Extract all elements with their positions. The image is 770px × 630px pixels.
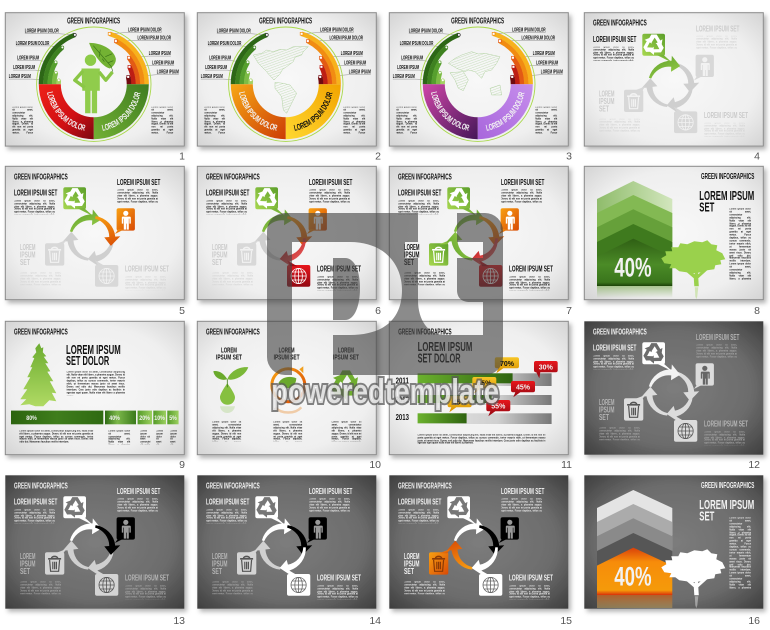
slide 14 cycle arrows <box>251 513 316 577</box>
slide 10 column headings: IPSUM SET <box>333 354 359 361</box>
slide 3 labels: LOREM IPSUM DOLOR <box>521 35 555 41</box>
slide 8 heading <box>699 189 754 215</box>
slide 6 headings: SET <box>212 258 222 267</box>
slide 14 headings: SET <box>212 567 222 576</box>
slide numbers: 16 <box>748 615 760 627</box>
slide 3 ring chart <box>420 26 536 142</box>
slide 3: world ring <box>388 12 574 152</box>
slide 2 labels: LOREM IPSUM <box>344 60 366 66</box>
slide 5 headings: LOREM <box>20 243 36 252</box>
slide 9 column texts <box>19 430 177 444</box>
slide 4 headings: LOREM <box>599 89 615 98</box>
slide 3 labels: LOREM IPSUM <box>541 70 563 76</box>
slide 1 ring chart: LOREM IPSUM DOLOR <box>47 92 86 131</box>
slide 5 text blocks <box>14 189 166 290</box>
slide 5 headings <box>14 178 169 274</box>
slide 11 background <box>389 321 568 455</box>
slide numbers: 5 <box>179 305 185 317</box>
slide 8 background <box>584 166 763 300</box>
slide 2 labels <box>201 27 371 80</box>
slide 2 label lines <box>201 32 371 80</box>
slide numbers: 6 <box>375 305 381 317</box>
slide numbers: 7 <box>566 305 572 317</box>
callouts: 30% <box>539 364 554 371</box>
slide 10: sprout, leaf cycle, recycle <box>197 321 376 455</box>
slide 16 percentage: 40% <box>614 562 652 592</box>
segmented percentage bar: 80% <box>26 415 37 422</box>
slide 2 labels: LOREM IPSUM <box>201 74 223 80</box>
slide 7 background <box>389 166 568 300</box>
slide 6 title: GREEN INFOGRAPHICS <box>206 172 260 181</box>
slide 2 ring chart <box>228 26 344 142</box>
slide 4 cycle arrows <box>638 51 703 115</box>
slide 11 heading: SET DOLOR <box>418 352 461 366</box>
slide 13 headings: LOREM <box>20 552 36 561</box>
slide 4 headings: SET <box>599 104 609 113</box>
slide numbers: 14 <box>369 615 381 627</box>
slide numbers: 2 <box>375 150 381 162</box>
slide 5 background <box>5 166 184 300</box>
slide 16 heading <box>699 498 754 524</box>
segmented percentage bar: 5% <box>169 415 177 422</box>
slide 3 labels: LOREM IPSUM DOLOR <box>400 41 433 47</box>
slide 6 headings: LOREM IPSUM SET <box>206 189 249 198</box>
slide 1 labels: LOREM IPSUM DOLOR <box>137 35 171 41</box>
slide 3 label lines <box>393 32 563 80</box>
year labels: 2011 <box>396 375 409 385</box>
slide numbers <box>173 150 760 627</box>
slide 3 ring chart: LOREM IPSUM DOLOR <box>486 92 524 131</box>
slide 10 column headings: IPSUM SET <box>274 354 300 361</box>
slide 4 background <box>584 13 763 146</box>
slide 7: cycle, step four <box>389 166 568 300</box>
slide 2 labels: LOREM IPSUM DOLOR <box>320 27 354 33</box>
slide 9 background <box>5 321 184 455</box>
slide 13 text blocks <box>14 498 166 599</box>
slide 11 heading: LOREM IPSUM <box>418 340 472 354</box>
slide 5 headings: LOREM IPSUM SET <box>14 189 57 198</box>
slide 7 headings: IPSUM <box>404 251 420 260</box>
slide 13 headings <box>14 487 169 583</box>
slide 3 labels: LOREM IPSUM DOLOR <box>409 29 443 35</box>
slide 2 labels: LOREM IPSUM <box>205 65 227 71</box>
slide 15 cycle arrows <box>443 513 508 577</box>
slide 12 headings: LOREM <box>599 398 615 407</box>
slide 14 headings: LOREM IPSUM SET <box>309 487 352 496</box>
icon: white tree <box>661 549 725 608</box>
year labels: 2013 <box>396 412 409 422</box>
slide 6 background <box>197 166 376 300</box>
slide 7 headings: LOREM <box>404 243 420 252</box>
year labels: 2012 <box>396 394 409 404</box>
slide 10 column headings: LOREM <box>221 347 237 354</box>
slide 5 icon tiles <box>45 187 135 287</box>
map: world <box>448 52 502 95</box>
slide 7 headings: LOREM IPSUM SET <box>509 265 553 274</box>
slide 1 labels: LOREM IPSUM <box>17 56 39 62</box>
slide 16 chevron stack <box>597 490 672 608</box>
slide 15 text blocks <box>398 498 550 599</box>
slide 7 headings: LOREM IPSUM SET <box>501 178 544 187</box>
slide 3 labels: LOREM IPSUM <box>401 56 423 62</box>
slide 1 labels <box>9 27 179 80</box>
slide 12 headings <box>593 333 748 429</box>
slide 11 heading <box>418 340 472 366</box>
slide 3 title: GREEN INFOGRAPHICS <box>451 16 504 26</box>
slide 7 icon tiles <box>429 187 519 287</box>
slide 7 headings: SET <box>404 258 414 267</box>
slide 1 labels: LOREM IPSUM <box>149 51 171 57</box>
slide 13: dark cycle, step two <box>5 475 184 609</box>
slide 6 cycle arrows <box>251 204 316 268</box>
slide 11 title: GREEN INFOGRAPHICS <box>398 327 452 336</box>
slide 13 headings: LOREM IPSUM SET <box>125 574 169 583</box>
slide 1 labels: LOREM IPSUM <box>9 74 31 80</box>
slide 4 headings <box>593 24 748 120</box>
slide 3 labels: LOREM IPSUM <box>533 51 555 57</box>
slide 7 headings <box>398 178 553 274</box>
slide 6 headings: LOREM IPSUM SET <box>317 265 361 274</box>
slide 2 labels: LOREM IPSUM <box>209 56 231 62</box>
slide 14 headings: IPSUM <box>212 560 228 569</box>
year labels <box>396 375 409 422</box>
slide 6 headings: LOREM <box>212 243 228 252</box>
slide 12 background <box>584 321 763 455</box>
slide 3 labels: LOREM IPSUM <box>397 65 419 71</box>
slide numbers: 4 <box>754 150 760 162</box>
slide 10 background <box>197 321 376 455</box>
slide numbers: 1 <box>179 150 185 162</box>
slide 14 headings <box>206 487 361 583</box>
slide 14 headings: LOREM <box>212 552 228 561</box>
slide 13 icon tiles <box>45 496 135 596</box>
slide 2 title: GREEN INFOGRAPHICS <box>259 16 312 26</box>
slide numbers: 3 <box>566 150 572 162</box>
icon: recycle arrows <box>327 370 362 402</box>
slide 4 title: GREEN INFOGRAPHICS <box>593 19 647 28</box>
slide 6 headings <box>206 178 361 274</box>
slide 10 column headings <box>216 347 359 361</box>
slide 1 labels: LOREM IPSUM <box>13 65 35 71</box>
slide 7 text blocks <box>398 189 550 290</box>
callouts <box>448 357 558 416</box>
slide 15 headings: IPSUM <box>404 560 420 569</box>
slide 1 labels: LOREM IPSUM DOLOR <box>25 29 59 35</box>
slide 12 headings: IPSUM <box>599 406 615 415</box>
slide 7 title: GREEN INFOGRAPHICS <box>398 172 452 181</box>
slide 12 headings: LOREM IPSUM SET <box>696 333 739 342</box>
slide 2: Americas ring <box>196 12 382 152</box>
slide 5 headings: LOREM IPSUM SET <box>117 178 160 187</box>
slide 15 headings: LOREM IPSUM SET <box>501 487 544 496</box>
slide 12 headings: SET <box>599 413 609 422</box>
slide 9 column texts: Lorem ipsum dolor sit amet, consectetur adipiscing elit. Nulla vitae elit libero, a pharetra augue. Donec id elit non mi porta gravida at eget metus. Fusce dapibus, tellus ac cursus commodo, tortor mauris nibh, ut fermentum massa justo sit amet risus. Donec sed odio dui. Maecenas faucibus mollis interdum. <box>19 430 93 443</box>
slide 3 ring chart: LOREM IPSUM DOLOR <box>431 92 470 131</box>
slide 12: dark cycle <box>584 321 763 455</box>
slide 12 title: GREEN INFOGRAPHICS <box>593 327 647 336</box>
map: Americas <box>253 47 308 113</box>
slide 13 title: GREEN INFOGRAPHICS <box>14 481 68 490</box>
watermark logo <box>267 213 503 375</box>
slide 3 labels: LOREM IPSUM <box>393 74 415 80</box>
slide 15 background <box>389 475 568 609</box>
slide 10 column headings: LOREM <box>279 347 295 354</box>
slide 15 headings: LOREM IPSUM SET <box>398 498 441 507</box>
slide 13 headings: SET <box>20 567 30 576</box>
icon: person with leaf <box>75 43 116 113</box>
slide 5 cycle arrows <box>59 204 124 268</box>
slide 16 background <box>584 475 763 609</box>
slide 15 headings <box>398 487 553 583</box>
slide 12 icon tiles <box>624 342 714 442</box>
slide 3 labels: LOREM IPSUM <box>536 60 558 66</box>
slide 9 heading <box>66 343 121 368</box>
slide 1 labels: LOREM IPSUM <box>157 70 179 76</box>
slide 5 headings: IPSUM <box>20 251 36 260</box>
slide 12 text blocks <box>593 344 745 445</box>
slide 6: cycle, step three <box>197 166 376 300</box>
slide 6 icon tiles <box>237 187 327 287</box>
slide 14: dark cycle, step three <box>197 475 376 609</box>
slide 11 text: Lorem ipsum dolor sit amet, consectetur adipiscing elit. Nulla vitae elit libero, a pharetra augue. Donec id elit non mi porta gravida at eget metus. Fusce dapibus, tellus ac cursus commodo, tortor mauris nibh, ut fermentum massa justo sit amet risus. Donec sed odio dui. Maecenas faucibus mollis interdum. Cras justo odio dapibus ac facilisis in egestas eget quam nulla vitae elit libero a pharetra. <box>418 434 546 445</box>
slide 2 labels: LOREM IPSUM DOLOR <box>208 41 241 47</box>
slide 16: dark chevrons and tree <box>584 475 763 609</box>
slide 1 ring chart <box>36 26 152 142</box>
slide 9 heading: LOREM IPSUM <box>66 343 121 357</box>
slide 7 headings: LOREM IPSUM SET <box>398 189 441 198</box>
slide 14 icon tiles <box>237 496 327 596</box>
slide 14 headings: LOREM IPSUM SET <box>206 498 249 507</box>
slide 6 headings: IPSUM <box>212 251 228 260</box>
slide 4 headings: IPSUM <box>599 97 615 106</box>
segmented percentage bar: 10% <box>154 415 165 422</box>
slide numbers: 12 <box>748 459 760 471</box>
slide 15 headings: SET <box>404 567 414 576</box>
slide 4: cycle, step one <box>584 13 763 146</box>
slide 10 title: GREEN INFOGRAPHICS <box>206 327 260 336</box>
slide 2 background <box>197 13 376 146</box>
slide 8: 40% chevrons and tree <box>584 166 763 300</box>
slide 5 headings: SET <box>20 258 30 267</box>
slide 13 headings: IPSUM <box>20 560 36 569</box>
slide 3 background <box>389 13 568 146</box>
slide 1 background <box>5 13 184 146</box>
slide 9 heading: SET DOLOR <box>66 354 109 368</box>
slide 15 icon tiles <box>429 496 519 596</box>
slide numbers: 11 <box>561 459 572 471</box>
icon: tree <box>661 240 725 299</box>
slide 14 headings: LOREM IPSUM SET <box>317 574 361 583</box>
slide 4 headings: LOREM IPSUM SET <box>696 24 739 33</box>
slide 1 ring chart: LOREM IPSUM DOLOR <box>102 92 140 131</box>
icon: pine tree <box>20 343 56 406</box>
slide 5 title: GREEN INFOGRAPHICS <box>14 172 68 181</box>
slide 1 labels: LOREM IPSUM <box>152 60 174 66</box>
slide 1: person ring <box>4 12 190 152</box>
slide numbers: 8 <box>754 305 760 317</box>
slide 9: pine tree and bar <box>5 321 184 455</box>
slide 2 ring chart: LOREM IPSUM DOLOR <box>239 92 278 131</box>
callouts: 70% <box>500 361 515 368</box>
slide 4 icon tiles <box>624 34 714 133</box>
segmented percentage bar: 20% <box>139 415 150 422</box>
watermark wordmark: poweredtemplate <box>271 373 499 411</box>
segmented percentage bar: 40% <box>109 415 120 422</box>
slide 8 chevron stack <box>597 181 672 298</box>
slide 10 column headings: LOREM <box>338 347 354 354</box>
slide 12 cycle arrows <box>638 359 703 423</box>
slide 14 text blocks <box>206 498 358 599</box>
icon: leaf in cycle <box>272 366 305 413</box>
slide 13 background <box>5 475 184 609</box>
slide numbers: 9 <box>179 459 185 471</box>
slide 15 headings: LOREM IPSUM SET <box>509 574 553 583</box>
icon: sprout with drop <box>213 367 248 413</box>
slide numbers: 10 <box>369 459 381 471</box>
slide 2 ring chart: LOREM IPSUM DOLOR <box>294 92 332 131</box>
slide 15 title: GREEN INFOGRAPHICS <box>398 481 452 490</box>
slide 8 heading: SET <box>699 201 715 215</box>
callouts: 45% <box>516 384 531 391</box>
slide 12 headings: LOREM IPSUM SET <box>593 344 636 353</box>
slide 2 labels: LOREM IPSUM <box>341 51 363 57</box>
callouts: 55% <box>477 380 492 387</box>
callouts: 45% <box>453 399 467 406</box>
bar chart <box>418 373 552 424</box>
slide 13 headings: LOREM IPSUM SET <box>14 498 57 507</box>
slide 2 labels: LOREM IPSUM <box>349 70 371 76</box>
slide numbers: 15 <box>560 615 572 627</box>
slide 13 headings: LOREM IPSUM SET <box>117 487 160 496</box>
slide 1 labels: LOREM IPSUM DOLOR <box>16 41 49 47</box>
slide 1 label lines <box>9 32 179 80</box>
slide 2 labels: LOREM IPSUM DOLOR <box>330 35 363 41</box>
slide 1 title: GREEN INFOGRAPHICS <box>67 16 120 26</box>
slide 13 cycle arrows <box>59 513 124 577</box>
slide 7 cycle arrows <box>443 204 508 268</box>
slide 3 labels <box>393 27 563 80</box>
slide 4 headings: LOREM IPSUM SET <box>593 35 636 44</box>
slide 4 text blocks <box>593 36 745 136</box>
slide 5 headings: LOREM IPSUM SET <box>125 265 169 274</box>
callouts: 55% <box>491 403 506 410</box>
slide 2 labels: LOREM IPSUM DOLOR <box>217 29 251 35</box>
slide 9 title: GREEN INFOGRAPHICS <box>14 327 68 336</box>
slide numbers: 13 <box>173 615 185 627</box>
slide 16 heading: SET <box>699 510 715 524</box>
slide 8 percentage: 40% <box>614 253 652 283</box>
slide 1 labels: LOREM IPSUM DOLOR <box>128 27 162 33</box>
segmented percentage bar <box>11 411 179 424</box>
slide 6 text blocks <box>206 189 358 290</box>
slide 5: cycle, step two <box>5 166 184 300</box>
slide 10 text blocks <box>212 421 362 441</box>
slide 14 title: GREEN INFOGRAPHICS <box>206 481 260 490</box>
slide 3 labels: LOREM IPSUM DOLOR <box>512 27 546 33</box>
slide 15: dark cycle, step four <box>389 475 568 609</box>
slide 10 column headings: IPSUM SET <box>216 354 242 361</box>
slide 14 background <box>197 475 376 609</box>
slide 6 headings: LOREM IPSUM SET <box>309 178 352 187</box>
slide 11: yearly bars <box>389 321 568 455</box>
slide 15 headings: LOREM <box>404 552 420 561</box>
